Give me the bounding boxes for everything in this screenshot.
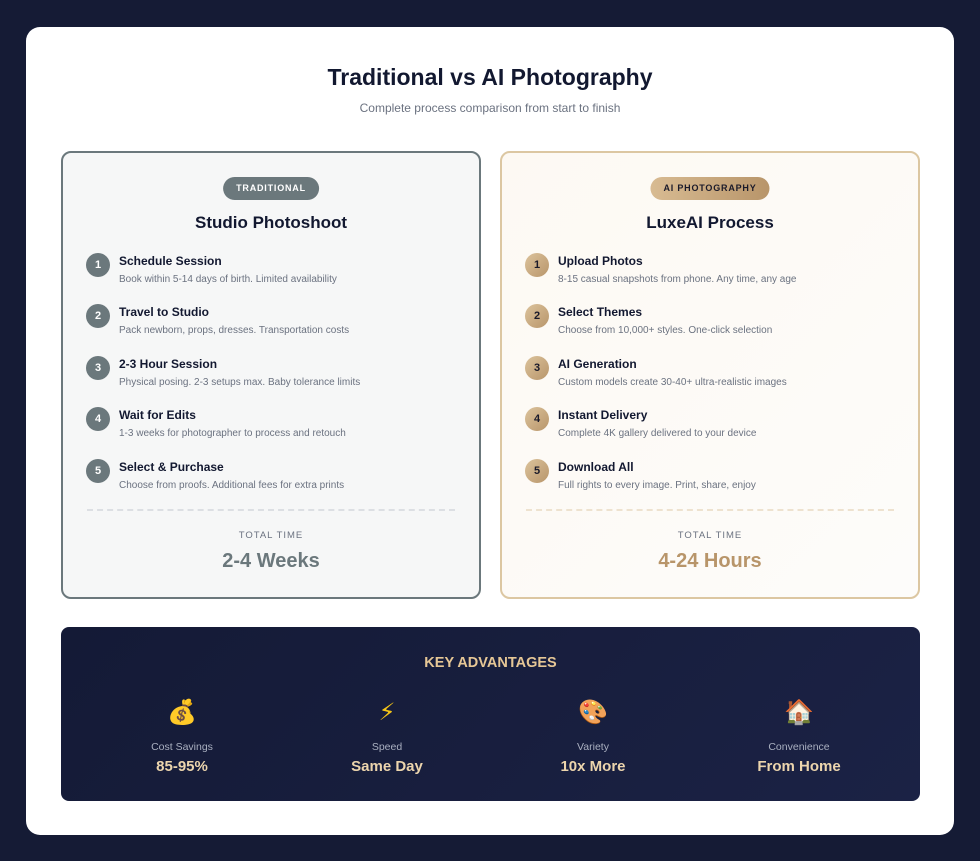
badge: traditional [223,177,319,200]
total time value: 2-4 Weeks [222,550,320,572]
total time label: TOTAL TIME [678,530,742,541]
step 4 [86,407,346,439]
step 3: 3 [534,362,540,374]
step 2 [525,304,772,336]
step 2: Choose from 10,000+ styles. One-click selection [558,325,772,336]
step 5: Choose from proofs. Additional fees for extra prints [119,480,344,491]
step 5 [525,459,756,491]
panel: AI [500,151,920,599]
advantage: convenience: Convenience [768,741,830,753]
heading: key advantages: KEY ADVANTAGES [424,655,557,671]
heading: studio photoshoot: Studio Photoshoot [195,213,347,232]
advantage: variety [560,699,626,775]
step 1 [525,253,796,285]
step 1: Schedule Session [119,254,222,268]
step 5: 5 [95,465,101,477]
step 2: Travel to Studio [119,305,209,319]
panel: traditional [61,151,481,599]
badge: AI photography: AI PHOTOGRAPHY [663,183,757,193]
step 3: 2-3 Hour Session [119,357,217,371]
step 4 [525,407,756,439]
step 5: Select & Purchase [119,460,224,474]
step 1: 1 [534,259,540,271]
step 2: 2 [95,310,101,322]
step 4: Complete 4K gallery delivered to your device [558,428,756,439]
step 3: AI Generation [558,357,637,371]
step 2: Select Themes [558,305,642,319]
advantage: speed [351,699,423,775]
step 3 [86,356,360,388]
step 5 [86,459,344,491]
step 2 [86,304,349,336]
advantage: cost savings: Cost Savings [151,741,213,753]
step 3: Custom models create 30-40+ ultra-realistic images [558,377,787,388]
badge: traditional: TRADITIONAL [236,183,306,193]
title: Traditional vs AI Photography [327,64,653,90]
step 4: Instant Delivery [558,408,647,422]
step 3: 3 [95,362,101,374]
step 2: Pack newborn, props, dresses. Transportation costs [119,325,349,336]
advantage: convenience: From Home [757,758,841,775]
step 1: Book within 5-14 days of birth. Limited availability [119,274,337,285]
step 3 [525,356,787,388]
total time value: 4-24 Hours [658,550,762,572]
icon: palette: 🎨 [578,699,608,726]
heading: LuxeAI process: LuxeAI Process [646,213,774,232]
step 4: 1-3 weeks for photographer to process and retouch [119,428,346,439]
step 1: Upload Photos [558,254,643,268]
advantage: speed: Speed [372,741,402,753]
icon: lightning: ⚡ [379,699,395,726]
advantage: cost savings [151,698,213,775]
step 5: Download All [558,460,634,474]
advantage: cost savings: 85-95% [156,758,208,775]
step 1 [86,253,337,285]
subtitle: Complete process comparison from start to finish [360,101,620,115]
step 1: 1 [95,259,101,271]
step 4: 4 [534,413,540,425]
advantage: variety: 10x More [560,758,626,775]
badge: AI photography [650,177,770,200]
step 1: 8-15 casual snapshots from phone. Any time, any age [558,274,796,285]
advantage: convenience [757,699,841,775]
step 5: Full rights to every image. Print, share, enjoy [558,480,756,491]
step 5: 5 [534,465,540,477]
step 3: Physical posing. 2-3 setups max. Baby tolerance limits [119,377,360,388]
step 4: 4 [95,413,101,425]
step 4: Wait for Edits [119,408,196,422]
icon: money bag: 💰 [167,699,197,726]
panel: key advantages [61,627,920,801]
advantage: variety: Variety [577,741,609,753]
total time label: TOTAL TIME [239,530,303,541]
step 2: 2 [534,310,540,322]
icon: house: 🏠 [784,699,814,726]
advantage: speed: Same Day [351,758,423,775]
